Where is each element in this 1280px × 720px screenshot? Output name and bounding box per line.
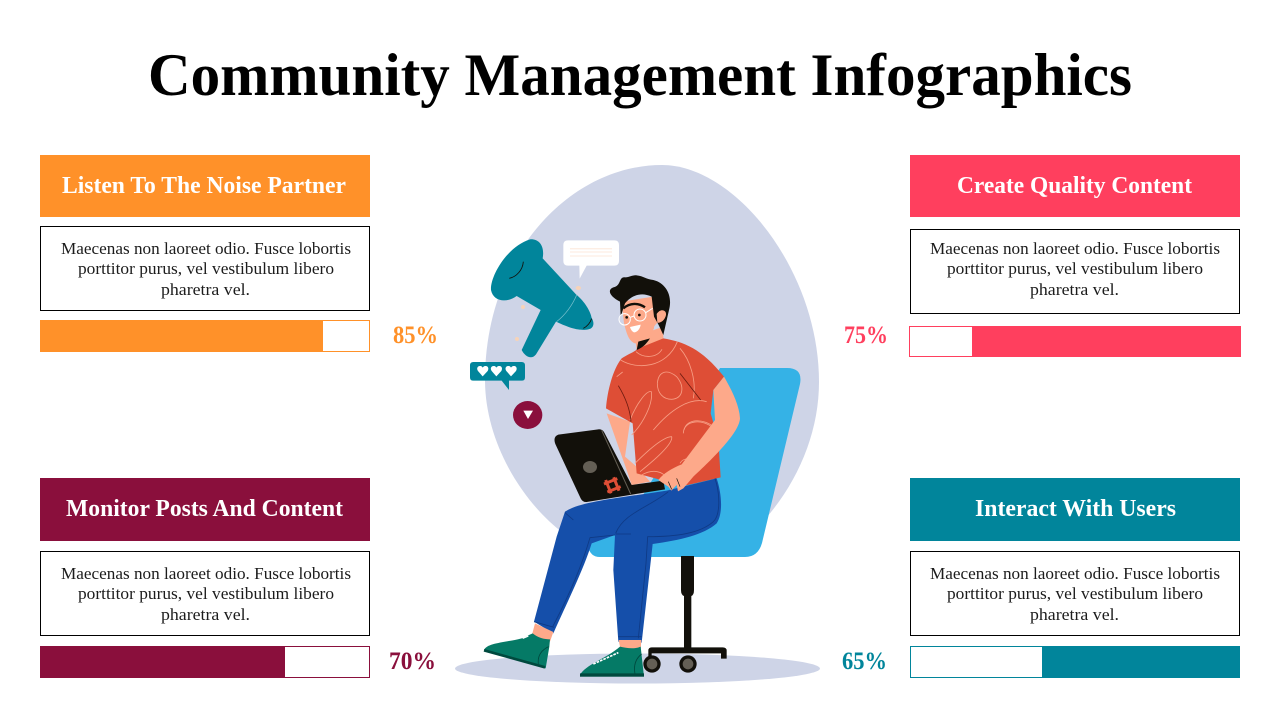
- heading: listen: Listen To The Noise Partner: [62, 173, 346, 199]
- laptop: [554, 429, 665, 502]
- shirt: [606, 338, 724, 486]
- illustration: community manager with laptop: [455, 165, 820, 684]
- percentage: 65%: 65%: [842, 648, 887, 675]
- text block: listen: Maecenas non laoreet odio. Fusce lobortis: [61, 239, 351, 258]
- heading: interact: [910, 478, 1240, 541]
- text block: create: [910, 230, 1240, 314]
- progress bar: 65%: [910, 646, 1240, 678]
- progress bar: 75%: [910, 326, 1241, 357]
- pants: [534, 478, 721, 643]
- office chair: [588, 368, 800, 673]
- text block: listen: porttitor purus, vel vestibulum libero: [78, 259, 334, 278]
- percentage: 70%: 70%: [389, 648, 436, 675]
- panel: create quality content: [844, 155, 1241, 357]
- title: Community Management Infographics: [148, 42, 1132, 108]
- text block: create: pharetra vel.: [1030, 280, 1119, 299]
- head and hair: [610, 275, 670, 350]
- heading: create: [910, 155, 1240, 217]
- neck: [635, 327, 663, 352]
- text block: create: Maecenas non laoreet odio. Fusce lobortis: [930, 239, 1220, 258]
- progress bar: 85%: [40, 320, 370, 352]
- icon: hearts bubble: [470, 362, 525, 390]
- heading: create: Create Quality Content: [957, 173, 1192, 199]
- heading: monitor: Monitor Posts And Content: [66, 496, 343, 522]
- text block: listen: [40, 226, 370, 310]
- percentage: 75%: 75%: [844, 322, 888, 349]
- text block: monitor: Maecenas non laoreet odio. Fusce lobortis: [61, 564, 351, 583]
- text block: monitor: [40, 552, 370, 636]
- percentage: 85%: 85%: [393, 322, 438, 349]
- text block: interact: [910, 552, 1240, 636]
- back arm: [607, 413, 650, 485]
- front arm and hand: [658, 377, 740, 491]
- text block: interact: porttitor purus, vel vestibulum libero: [947, 584, 1203, 603]
- heading: monitor: [40, 478, 370, 541]
- heading: interact: Interact With Users: [975, 496, 1176, 522]
- shoes: [484, 623, 644, 677]
- progress bar: 70%: [40, 646, 370, 678]
- icon: speech bubble: [563, 240, 619, 279]
- icon: notification circle: [513, 401, 542, 429]
- panel: listen to the noise partner: [40, 155, 438, 352]
- text block: listen: pharetra vel.: [161, 280, 250, 299]
- icon: megaphone: [491, 239, 593, 357]
- person: [484, 275, 740, 677]
- text block: monitor: pharetra vel.: [161, 605, 250, 624]
- panel: monitor posts and content: [40, 478, 436, 678]
- background blob: [485, 165, 819, 550]
- text block: create: porttitor purus, vel vestibulum libero: [947, 259, 1203, 278]
- floor shadow: [455, 654, 820, 684]
- panel: interact with users: [842, 478, 1240, 678]
- heading: listen: [40, 155, 370, 217]
- text block: interact: Maecenas non laoreet odio. Fusce lobortis: [930, 564, 1220, 583]
- text block: interact: pharetra vel.: [1030, 605, 1119, 624]
- text block: monitor: porttitor purus, vel vestibulum libero: [78, 584, 334, 603]
- shirt lower detail: [635, 422, 713, 478]
